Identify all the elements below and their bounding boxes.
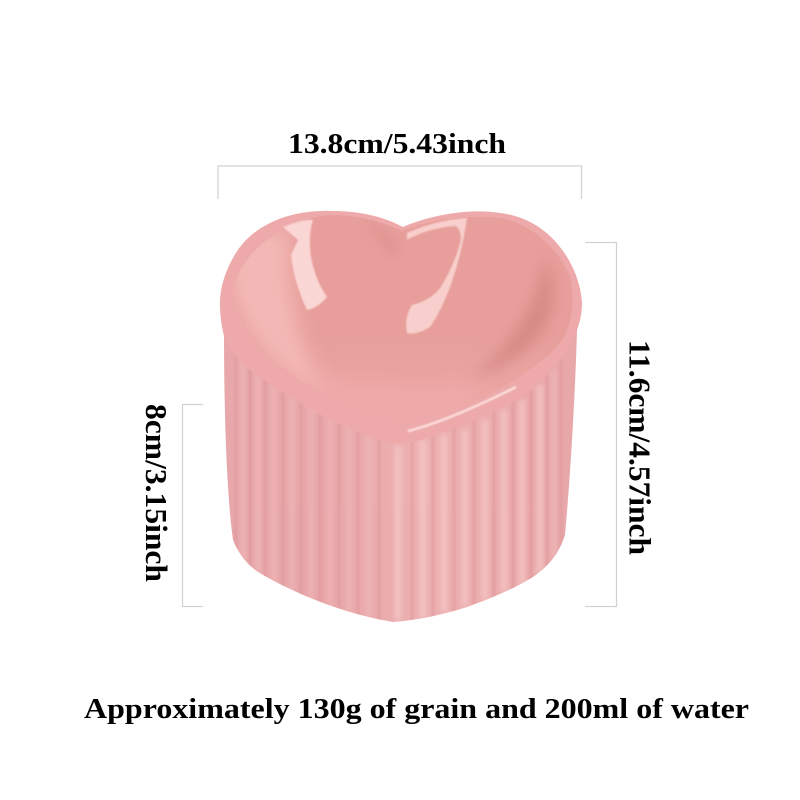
body height bracket xyxy=(182,404,203,606)
bowl rim xyxy=(220,211,582,444)
glaze highlight right xyxy=(406,218,467,334)
bowl illustration xyxy=(220,211,582,622)
inner shading centre xyxy=(350,222,397,258)
inner light bottom xyxy=(300,370,490,410)
capacity caption: Approximately 130g of grain and 200ml of water xyxy=(84,694,749,725)
body height label: 8cm/3.15inch xyxy=(139,404,174,582)
inner light left side xyxy=(232,229,316,386)
dimension: total height xyxy=(585,242,658,606)
dimension: width xyxy=(218,129,582,199)
bowl inner basin xyxy=(232,215,572,420)
total height bracket xyxy=(585,242,616,606)
width bracket xyxy=(218,166,582,199)
bowl body with ribs xyxy=(224,330,577,622)
glaze highlight left xyxy=(283,220,327,310)
width label: 13.8cm/5.43inch xyxy=(288,129,506,160)
infographic: heart bowl dimensions xyxy=(84,133,748,724)
dimension: body height xyxy=(139,404,203,606)
total height label: 11.6cm/4.57inch xyxy=(622,340,658,555)
inner shading right xyxy=(483,269,555,373)
rim highlight front xyxy=(408,387,516,431)
